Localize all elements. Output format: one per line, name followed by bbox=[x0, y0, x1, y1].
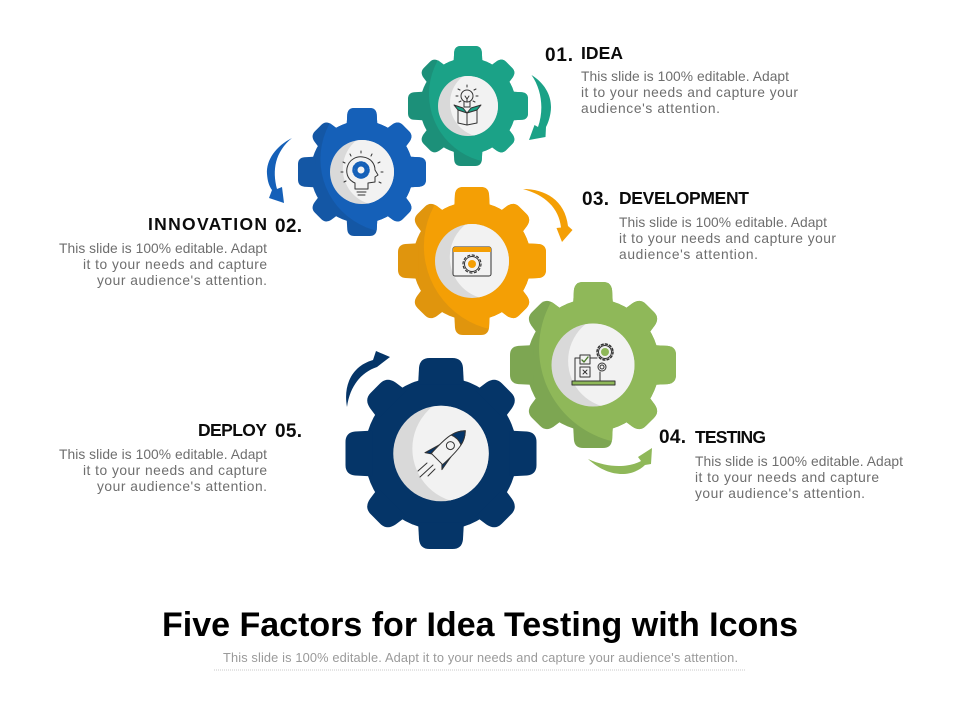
text block: 05 deploy: DEPLOY bbox=[198, 420, 267, 440]
text block: 04 testing: your audience's attention. bbox=[695, 486, 865, 501]
icon: light bulb over open box bbox=[454, 85, 481, 125]
arrow: testing (green) bbox=[588, 448, 652, 474]
icon: browser window with gear bbox=[453, 247, 491, 276]
icon: gear in head bulb bbox=[341, 151, 383, 195]
text block: 03 development: 03. bbox=[582, 189, 609, 210]
text block: 01 idea: audience's attention. bbox=[581, 101, 720, 116]
arrow: innovation (blue) bbox=[267, 138, 292, 203]
text block: 03 development: This slide is 100% editable. Adapt bbox=[619, 215, 827, 230]
gear: idea (teal) bbox=[408, 46, 528, 166]
title: Five Factors for Idea Testing with Icons bbox=[162, 606, 798, 644]
text block: 04 testing: 04. bbox=[659, 427, 686, 448]
text block: 04 testing: TESTING bbox=[695, 427, 766, 447]
text block: 05 deploy bbox=[59, 420, 302, 494]
gear: testing (green) bbox=[510, 282, 676, 448]
gear: development (orange) bbox=[398, 187, 546, 335]
text block: 05 deploy: it to your needs and capture bbox=[83, 463, 267, 478]
text block: 04 testing: This slide is 100% editable. Adapt bbox=[695, 454, 903, 469]
subtitle: This slide is 100% editable. Adapt it to your needs and capture your audience's attention. bbox=[223, 650, 738, 665]
text block: 02 innovation: INNOVATION bbox=[148, 214, 267, 234]
text block: 03 development: audience's attention. bbox=[619, 247, 758, 262]
gear: innovation (blue) bbox=[298, 108, 426, 236]
text block: 02 innovation: This slide is 100% editable. Adapt bbox=[59, 241, 267, 256]
icon: test checklist with gears bbox=[572, 344, 615, 385]
icon: rocket bbox=[418, 422, 473, 477]
text block: 03 development bbox=[582, 188, 836, 262]
text block: 02 innovation bbox=[59, 214, 302, 288]
text block: 02 innovation: 02. bbox=[275, 216, 302, 237]
text block: 01 idea: it to your needs and capture your bbox=[581, 85, 798, 100]
arrow: idea (teal) bbox=[529, 75, 551, 140]
text block: 02 innovation: it to your needs and capture bbox=[83, 257, 267, 272]
arrow: deploy (navy) bbox=[346, 351, 390, 407]
text block: 05 deploy: This slide is 100% editable. Adapt bbox=[59, 447, 267, 462]
arrow: development (orange) bbox=[523, 189, 572, 242]
gear: deploy (navy) bbox=[346, 358, 536, 549]
text block: 01 idea: IDEA bbox=[581, 43, 623, 63]
text block: 01 idea: 01. bbox=[545, 45, 573, 66]
text block: 03 development: it to your needs and capture your bbox=[619, 231, 836, 246]
text block: 01 idea bbox=[545, 43, 798, 116]
text block: 04 testing: it to your needs and capture bbox=[695, 470, 879, 485]
text block: 03 development: DEVELOPMENT bbox=[619, 188, 749, 208]
text block: 05 deploy: your audience's attention. bbox=[97, 479, 267, 494]
text block: 02 innovation: your audience's attention. bbox=[97, 273, 267, 288]
text block: 04 testing bbox=[659, 427, 903, 501]
text block: 05 deploy: 05. bbox=[275, 421, 302, 442]
text block: 01 idea: This slide is 100% editable. Adapt bbox=[581, 69, 789, 84]
